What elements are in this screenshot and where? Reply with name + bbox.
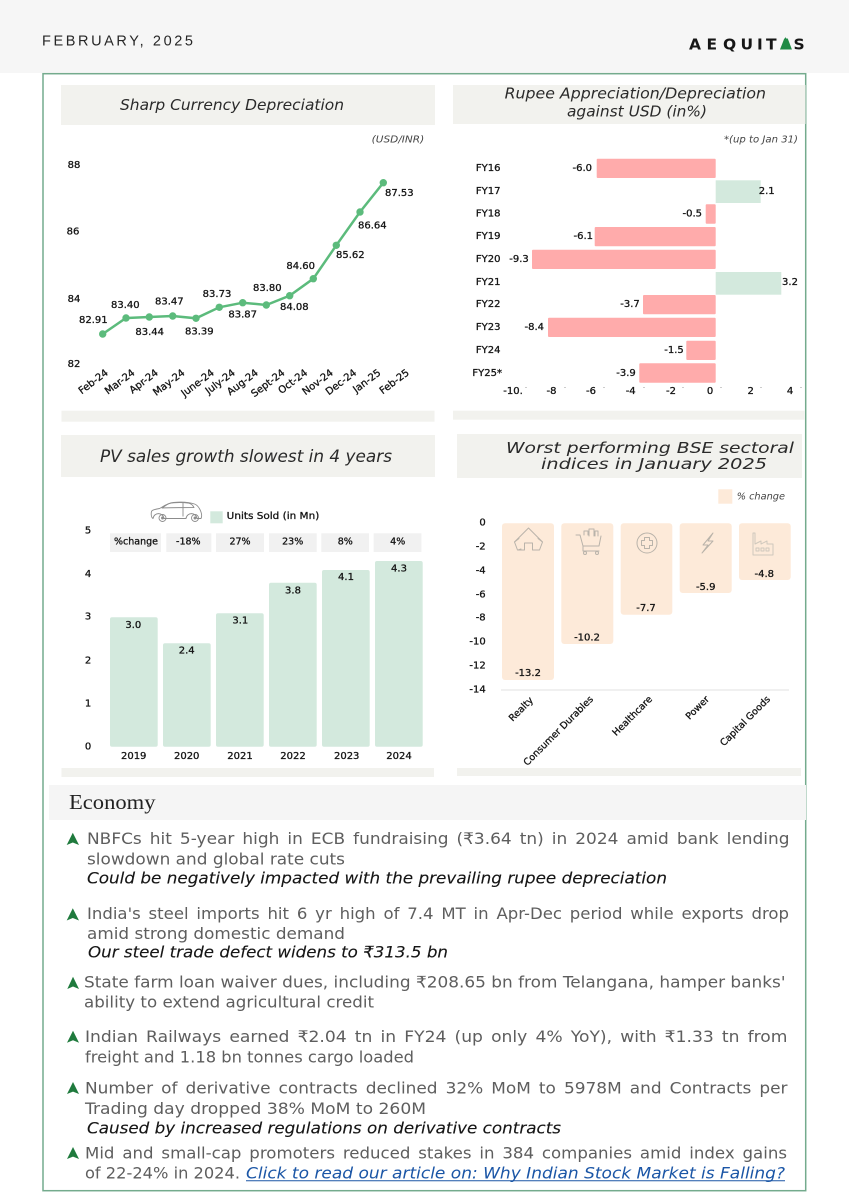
value labels: -0.5 — [683, 208, 702, 220]
category labels: Realty — [507, 695, 536, 724]
bullet: promoters reduced stakes — [67, 1143, 787, 1183]
icon: house — [514, 528, 542, 550]
y axis labels: 84 — [68, 294, 80, 305]
header band — [0, 0, 849, 73]
value labels: -6.1 — [574, 231, 593, 242]
bullet: NBFC fundraising: NBFCs hit 5-year high in ECB fundraising (₹3.64 tn) in 2024 amid bank lending — [87, 829, 790, 848]
footer strip — [453, 411, 804, 420]
bullet: Indian Railways: Indian Railways earned ₹2.04 tn in FY24 (up only 4% YoY), with ₹1.33 tn from — [85, 1027, 788, 1046]
heading — [457, 434, 802, 478]
x axis labels: July-24 — [203, 368, 238, 398]
y axis labels: 5 — [85, 526, 91, 536]
value labels: -8.4 — [525, 322, 544, 333]
heading: indices in January 2025 — [541, 455, 767, 473]
value labels: 3.1 — [232, 616, 248, 626]
y axis labels — [85, 526, 91, 752]
y axis labels: 2 — [85, 656, 91, 666]
y axis labels — [469, 518, 486, 696]
value labels: 4.3 — [391, 564, 407, 574]
data labels: 86.64 — [358, 220, 387, 232]
y axis labels: 4 — [85, 569, 91, 580]
x axis labels: 2020 — [174, 751, 199, 762]
x axis labels — [77, 368, 412, 400]
y axis labels: -4 — [476, 566, 486, 576]
footer strip — [62, 411, 434, 422]
category labels: FY22 — [476, 299, 500, 310]
value labels: -10.2 — [574, 632, 600, 644]
percent change row: 27% — [229, 536, 251, 548]
category labels: FY21 — [476, 277, 500, 288]
y axis labels: -8 — [476, 612, 486, 624]
x axis labels: Oct-24 — [277, 368, 310, 397]
heading: Economy — [69, 790, 156, 814]
footer strip — [62, 768, 434, 777]
value labels — [515, 569, 774, 679]
x axis labels: Sept-24 — [249, 368, 287, 400]
value labels: 2.4 — [179, 646, 195, 656]
icon: lightning bolt — [702, 533, 713, 553]
y axis labels: 86 — [67, 226, 79, 238]
value labels: -9.3 — [509, 254, 529, 265]
heading: Worst performing BSE sectoral — [506, 439, 795, 457]
value labels: -3.9 — [616, 368, 636, 379]
x axis labels: -8 — [547, 386, 556, 397]
category labels: FY23 — [476, 322, 500, 333]
heading — [49, 785, 806, 820]
panel: Sharp Currency Depreciation line chart — [61, 85, 435, 422]
value labels: 2.1 — [759, 186, 775, 197]
heading — [61, 435, 435, 477]
value labels: 3.0 — [125, 620, 141, 631]
x axis labels: 2024 — [386, 751, 412, 762]
percent change row: 8% — [338, 536, 353, 548]
heading: PV sales growth slowest in 4 years — [100, 447, 392, 466]
bullet: steel imports: amid strong domestic demand — [87, 924, 345, 943]
category labels — [507, 694, 773, 768]
panel: Economy news — [49, 785, 806, 1183]
data labels: 84.08 — [280, 302, 309, 313]
icon: factory — [753, 533, 773, 555]
bullet: Indian Railways: freight and 1.18 bn tonnes cargo loaded — [85, 1048, 414, 1067]
category labels — [472, 163, 502, 379]
y axis labels: 3 — [85, 612, 91, 622]
x axis labels — [503, 386, 793, 397]
heading — [453, 85, 806, 124]
panel: PV sales growth column chart — [61, 435, 435, 777]
panel: Rupee Appreciation/Depreciation bar chart — [453, 85, 806, 420]
value labels: -1.5 — [664, 345, 684, 356]
data labels: 83.44 — [135, 327, 164, 338]
x axis labels: June-24 — [179, 368, 217, 400]
percent change row: %change — [114, 536, 158, 548]
category labels: FY18 — [476, 208, 500, 220]
x axis labels: Nov-24 — [301, 368, 336, 398]
x axis labels: Jan-25 — [351, 368, 383, 396]
data labels: 83.39 — [185, 326, 214, 338]
x axis labels — [121, 751, 412, 762]
category labels: FY16 — [476, 163, 500, 174]
line series — [99, 179, 387, 338]
x axis labels: -4 — [626, 386, 636, 397]
percent change row — [110, 533, 421, 552]
value labels: -5.9 — [696, 582, 715, 593]
x axis labels: 2023 — [334, 751, 359, 762]
y axis labels: 82 — [68, 359, 80, 370]
date: FEBRUARY, 2025 — [42, 34, 193, 50]
bullet: farm loan waiver: State farm loan waiver dues, including ₹208.65 bn from Telangana, hamper banks' — [84, 972, 786, 991]
value labels — [509, 163, 798, 379]
x axis labels: 2019 — [121, 751, 146, 762]
x axis labels: -6 — [586, 386, 596, 397]
horizontal bars — [532, 159, 781, 383]
bullet: NBFC fundraising — [67, 829, 789, 887]
category labels: Healthcare — [610, 694, 655, 739]
bullet: steel imports: India's steel imports hit 6 yr high of 7.4 MT in Apr-Dec period while exports drop — [87, 904, 789, 923]
bullet: promoters reduced stakes: Mid and small-cap promoters reduced stakes in 384 companies amid index gains — [85, 1143, 787, 1162]
value labels: 3.2 — [782, 277, 798, 288]
x axis labels: Dec-24 — [324, 368, 359, 398]
x axis labels: 2 — [748, 386, 754, 397]
category labels: FY25* — [472, 368, 502, 379]
columns — [502, 523, 791, 680]
data labels: 83.47 — [155, 296, 184, 308]
bullet: farm loan waiver — [67, 972, 786, 1012]
data labels — [79, 188, 414, 338]
icon: medical cross — [637, 533, 657, 553]
value labels: -6.0 — [573, 163, 592, 174]
bullet: derivative contracts: Caused by increased regulations on derivative contracts — [87, 1118, 561, 1137]
data labels: 87.53 — [385, 188, 414, 199]
y axis labels: 0 — [85, 742, 91, 752]
category labels: FY19 — [476, 231, 500, 242]
article link: Click to read our article on: Why Indian Stock Market is Falling? — [246, 1164, 786, 1183]
heading: Rupee Appreciation/Depreciation — [505, 85, 766, 103]
value labels: -7.7 — [636, 603, 656, 614]
panel: Worst performing BSE sectoral indices — [457, 434, 802, 776]
value labels: 4.1 — [338, 572, 354, 583]
bullet: steel imports — [67, 904, 789, 962]
category labels: Consumer Durables — [522, 694, 596, 768]
value labels — [125, 564, 407, 656]
x axis labels: Aug-24 — [225, 368, 261, 398]
heading: Sharp Currency Depreciation — [120, 96, 344, 114]
value labels: -3.7 — [620, 299, 640, 310]
columns — [110, 561, 423, 747]
data labels: 83.73 — [203, 289, 231, 300]
bullet: derivative contracts: Number of derivative contracts declined 32% MoM to 5978M and Contracts per — [85, 1078, 788, 1097]
logo: Aequitas: AEQUITAS — [689, 35, 805, 53]
axis line — [501, 689, 789, 691]
x axis labels: -2 — [666, 386, 676, 397]
y axis labels — [67, 160, 80, 370]
data labels: 83.40 — [111, 300, 140, 311]
x axis labels: 2021 — [227, 751, 253, 762]
data labels: 85.62 — [336, 250, 365, 261]
data labels: 83.80 — [253, 283, 282, 294]
bullet: NBFC fundraising: Could be negatively impacted with the prevailing rupee depreciation — [87, 868, 667, 887]
category labels: FY24 — [476, 345, 500, 356]
heading: against USD (in%) — [567, 103, 707, 121]
icon: car — [151, 502, 202, 522]
footer strip — [457, 768, 801, 776]
category labels: FY17 — [476, 186, 500, 197]
percent change row: 23% — [282, 536, 303, 548]
bullet: derivative contracts: Trading day dropped 38% MoM to 260M — [84, 1099, 426, 1118]
bullet: farm loan waiver: ability to extend agricultural credit — [84, 993, 374, 1012]
x axis labels: May-24 — [151, 368, 187, 399]
footnote: *(up to Jan 31) — [724, 134, 798, 145]
value labels: 3.8 — [285, 586, 301, 596]
value labels: -4.8 — [755, 569, 774, 580]
y axis labels: 1 — [85, 698, 91, 710]
bullet: promoters reduced stakes: of 22-24% in 2024. — [85, 1164, 240, 1183]
percent change row: 4% — [390, 536, 405, 548]
percent change row: -18% — [176, 536, 201, 548]
category labels: Capital Goods — [718, 694, 773, 749]
bullet: derivative contracts — [67, 1078, 788, 1137]
y axis labels: 88 — [68, 160, 80, 171]
value labels: -13.2 — [515, 668, 541, 679]
y axis labels: -6 — [476, 590, 486, 600]
x axis labels: Feb-24 — [77, 368, 111, 397]
data labels: 84.60 — [286, 261, 315, 272]
y axis labels: -12 — [469, 660, 486, 672]
x axis labels: Mar-24 — [103, 368, 137, 397]
legend: Units Sold (in Mn) — [227, 511, 319, 522]
x axis labels: -10. — [503, 386, 523, 397]
category labels: Power — [684, 694, 712, 722]
x axis labels: 0 — [707, 386, 713, 397]
unit note: (USD/INR) — [372, 135, 424, 146]
legend: % change — [737, 491, 785, 502]
bullet: Indian Railways — [67, 1027, 788, 1067]
legend — [718, 489, 785, 504]
y axis labels: -10 — [469, 636, 486, 648]
bullet: NBFC fundraising: slowdown and global rate cuts — [87, 849, 345, 868]
y axis labels: -14 — [469, 684, 486, 696]
x axis labels: Feb-25 — [378, 368, 412, 397]
bullet: steel imports: Our steel trade defect widens to ₹313.5 bn — [88, 943, 448, 962]
data labels: 82.91 — [79, 315, 108, 326]
x axis labels: Apr-24 — [128, 368, 161, 396]
x axis labels: 2022 — [280, 751, 306, 762]
icon: shopping cart — [576, 529, 601, 554]
category labels: FY20 — [476, 254, 500, 265]
heading — [61, 85, 435, 125]
data labels: 83.87 — [228, 310, 257, 320]
y axis labels: -2 — [476, 542, 486, 552]
y axis labels: 0 — [479, 518, 486, 528]
x axis labels: 4 — [787, 386, 793, 397]
